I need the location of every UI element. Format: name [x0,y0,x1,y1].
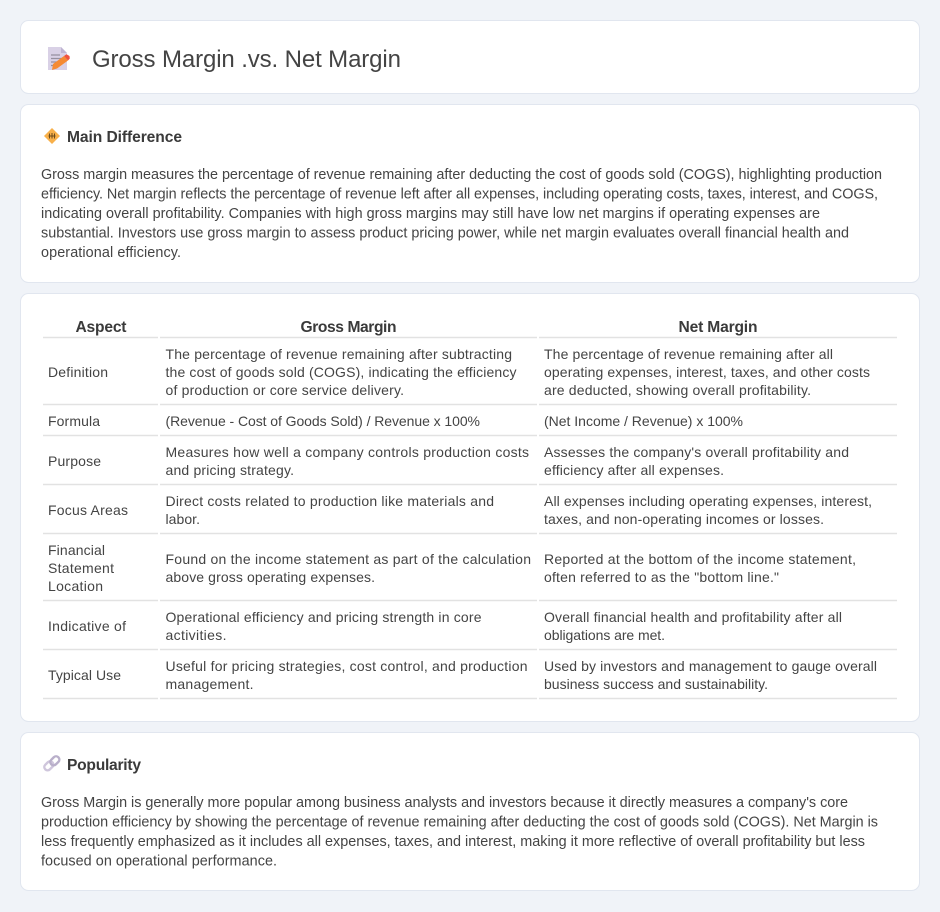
row: focus areas: Focus Areas [48,502,128,518]
icon: chain link [43,755,61,772]
row: financial statement location: Location [48,578,103,594]
text block: popularity paragraph: production efficiency by showing the percentage of revenue remaining after deducting the cost of goods sold (COGS). Net Margin is [41,814,878,830]
row: purpose: and pricing strategy. [166,462,294,478]
heading: main difference: Main Difference [67,129,182,146]
table header row [76,319,758,336]
table header row: Gross Margin [300,319,396,336]
icon: orange diamond sign [44,128,60,144]
row: typical use [48,658,877,692]
row: financial statement location: above gross operating expenses. [166,569,375,585]
panel: popularity [20,732,920,890]
text block: main difference paragraph: indicating overall profitability. Companies with high gross margins may still have low net margins if operating expenses are [41,206,820,222]
row: indicative of: Overall financial health and profitability after all [544,609,842,625]
row: definition: Definition [48,364,108,380]
panel: comparison table [20,294,920,722]
row: formula [48,413,743,429]
row: formula: (Net Income / Revenue) x 100% [544,413,743,429]
row: definition: of production or core service delivery. [166,382,404,398]
row: indicative of: activities. [166,627,226,643]
row: financial statement location: Found on the income statement as part of the calculation [166,551,531,567]
row: typical use: management. [166,676,254,692]
row: financial statement location [48,542,856,594]
table header row: Net Margin [678,319,758,336]
panel: main difference [20,104,920,282]
row: typical use: Typical Use [48,667,121,683]
row: definition: operating expenses, interest, taxes, and other costs [544,364,870,380]
text block: main difference paragraph: Gross margin measures the percentage of revenue remaining after deducting the cost of goods sold (COGS), highlighting production [41,167,882,183]
icon: memo with pencil [48,47,70,70]
row: formula: (Revenue - Cost of Goods Sold) / Revenue x 100% [166,413,480,429]
row: focus areas: taxes, and non-operating incomes or losses. [544,511,824,527]
row: typical use: Used by investors and management to gauge overall [544,658,877,674]
row: formula: Formula [48,413,100,429]
row: typical use: Useful for pricing strategies, cost control, and production [166,658,528,674]
row: purpose: Measures how well a company controls production costs [166,444,529,460]
row: purpose: Purpose [48,453,101,469]
title: Gross Margin .vs. Net Margin [92,46,401,73]
row: purpose [48,444,849,478]
row: focus areas: All expenses including operating expenses, interest, [544,493,872,509]
row: indicative of: obligations are met. [544,627,665,643]
heading: popularity: Popularity [67,757,141,774]
row: focus areas: Direct costs related to production like materials and [166,493,494,509]
panel: title header [20,20,920,94]
row: typical use: business success and sustainability. [544,676,768,692]
text block: main difference paragraph: substantial. Investors use gross margin to assess product pricing power, while net margin evaluates overall financial health and [41,226,849,242]
table header row: Aspect [76,319,126,336]
text block: main difference paragraph [41,167,882,261]
row: purpose: Assesses the company's overall profitability and [544,444,849,460]
row: financial statement location: Reported at the bottom of the income statement, [544,551,856,567]
row: indicative of [48,609,842,643]
row: financial statement location: often referred to as the "bottom line." [544,569,779,585]
text block: main difference paragraph: efficiency. Net margin reflects the percentage of revenue left after all expenses, including operating costs, taxes, interest, and COGS, [41,186,878,202]
text block: popularity paragraph [41,795,878,870]
text block: popularity paragraph: Gross Margin is generally more popular among business analysts and investors because it directly measures a company's core [41,795,848,811]
row: definition: are deducted, showing overall profitability. [544,382,811,398]
row: definition: The percentage of revenue remaining after subtracting [166,346,512,362]
row: focus areas [48,493,872,527]
row: definition: The percentage of revenue remaining after all [544,346,833,362]
text block: main difference paragraph: operational efficiency. [41,245,181,261]
text block: popularity paragraph: focused on operational performance. [41,854,277,870]
row: financial statement location: Financial [48,542,105,558]
row: purpose: efficiency after all expenses. [544,462,724,478]
row: definition: the cost of goods sold (COGS), indicating the efficiency [166,364,516,380]
row: indicative of: Operational efficiency and pricing strength in core [166,609,482,625]
row: definition [48,346,870,398]
text block: popularity paragraph: less frequently emphasized as it includes all expenses, taxes, and interest, making it more reflective of overall profitability but less [41,834,865,850]
row: financial statement location: Statement [48,560,114,576]
row: indicative of: Indicative of [48,618,126,634]
row: focus areas: labor. [166,511,200,527]
